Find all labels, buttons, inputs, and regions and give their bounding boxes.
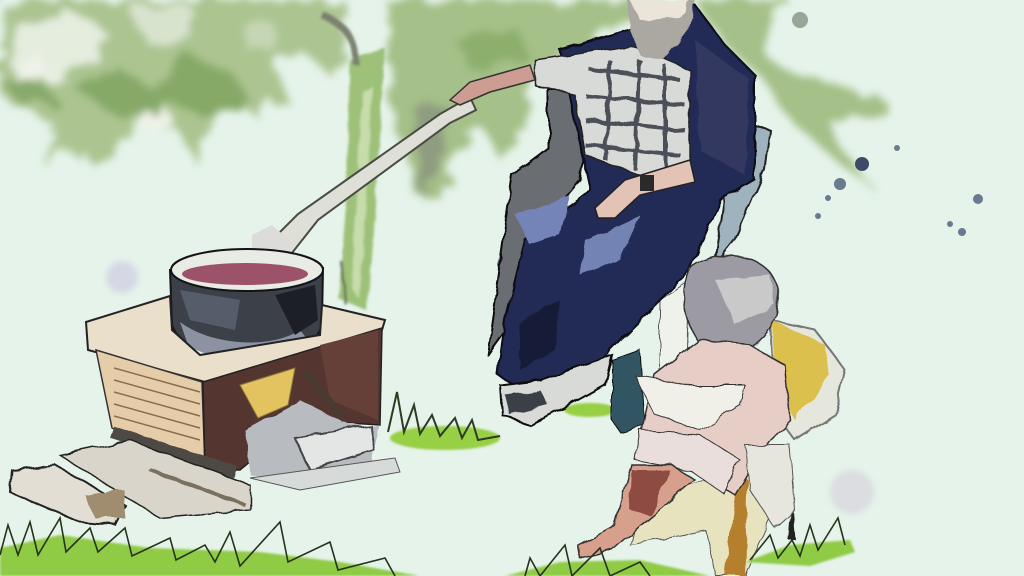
elder seated xyxy=(498,0,755,425)
cooking pot xyxy=(170,249,323,358)
foreground grass centre xyxy=(505,545,710,576)
foreground grass right xyxy=(745,518,855,566)
long ladle handle xyxy=(252,97,476,262)
stove top and brick stove xyxy=(86,296,385,470)
elder's resting hand xyxy=(595,160,695,218)
icon: yellow stove label xyxy=(240,368,295,418)
foreground grass left xyxy=(0,518,420,576)
paint splatters xyxy=(106,12,983,514)
grass patch behind stove xyxy=(388,392,500,450)
elder's chair xyxy=(487,90,770,432)
child's chair xyxy=(630,320,845,576)
tree foliage left xyxy=(0,0,345,170)
stove firewood opening xyxy=(112,372,378,480)
grass patch centre xyxy=(564,403,616,417)
elder's arm on ladle xyxy=(450,65,535,105)
tree trunk xyxy=(322,15,385,312)
tree foliage right xyxy=(695,0,885,195)
child seated xyxy=(578,256,795,558)
stack of firewood xyxy=(10,440,250,525)
tree foliage centre xyxy=(385,0,650,200)
stove shadow ground xyxy=(250,458,400,490)
